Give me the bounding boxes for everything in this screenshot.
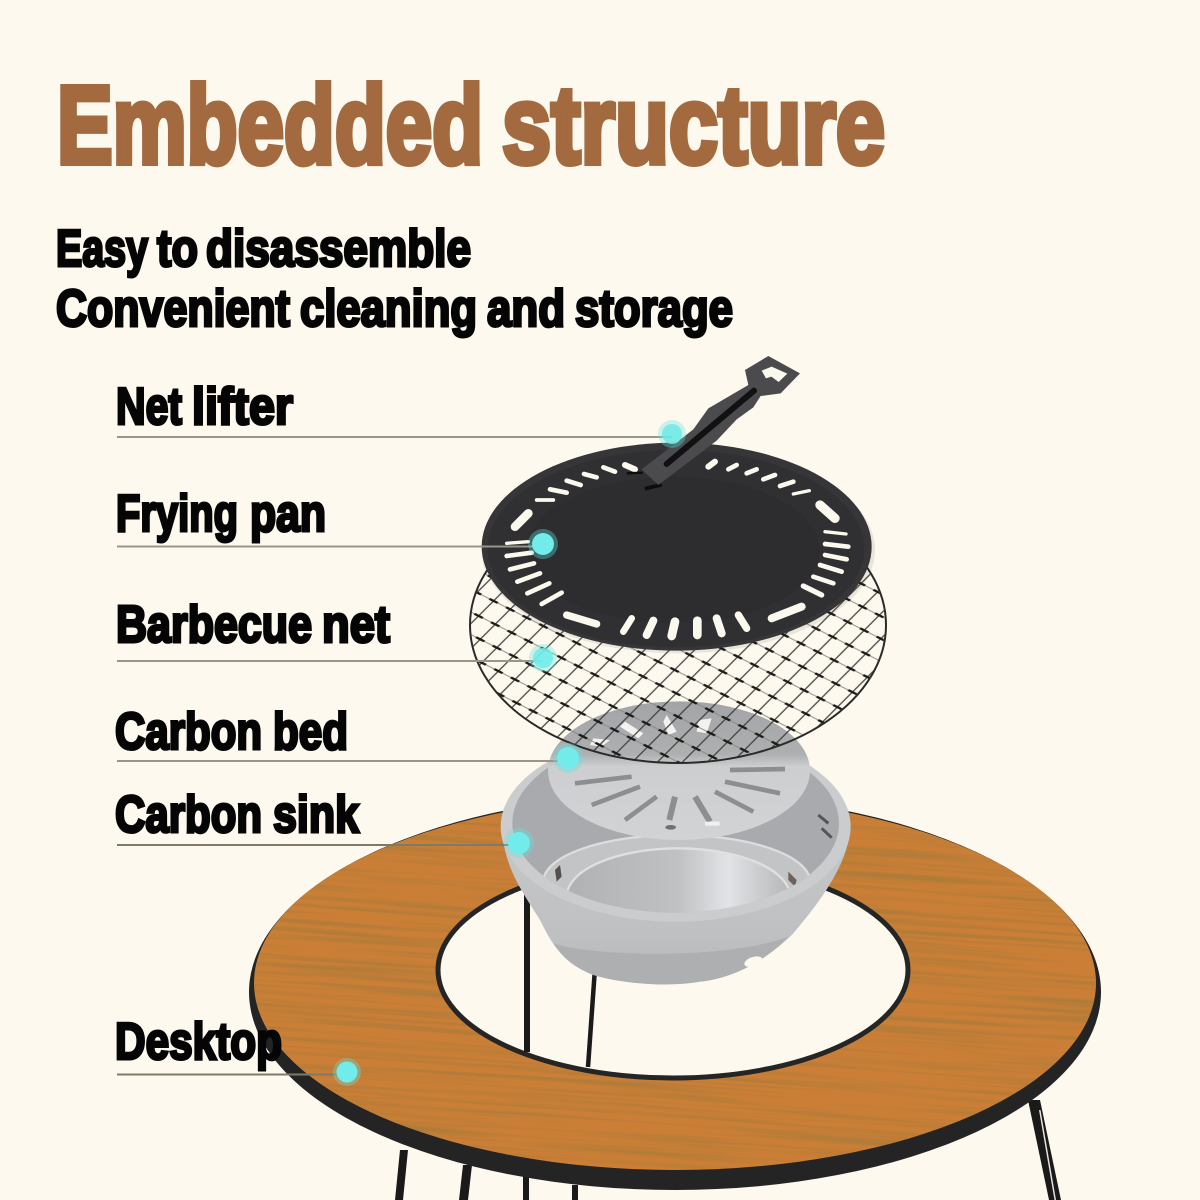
subtitle line 2: and (487, 280, 565, 338)
callouts (115, 378, 686, 1086)
leader line (117, 844, 519, 846)
lifter slits (627, 469, 643, 477)
label: Carbon (115, 786, 262, 844)
label: Net (116, 378, 182, 436)
subtitle line 1: to (157, 220, 198, 278)
wire mesh (471, 487, 885, 763)
lifter groove (667, 391, 754, 464)
frying pan (482, 443, 875, 653)
carbon bed: perforated disc (548, 701, 810, 840)
bottle opener (762, 367, 787, 382)
label: Barbecue (116, 596, 312, 654)
carbon sink: steel bowl (500, 762, 851, 984)
leader line (117, 1074, 347, 1076)
title: Embedded (57, 64, 483, 187)
label: lifter (192, 378, 293, 436)
label: bed (273, 703, 348, 761)
net lifter (627, 356, 800, 489)
callout: desktop (115, 1013, 361, 1086)
subtitle line 2: cleaning (300, 280, 477, 338)
disc slots (575, 769, 785, 822)
barbecue net (470, 487, 886, 763)
leader line (117, 660, 543, 662)
leader line (117, 760, 568, 762)
legs seen through the hole (527, 885, 595, 1067)
net rim (470, 487, 886, 763)
callout: carbon bed (115, 703, 583, 773)
marker dot (528, 529, 558, 559)
disc (548, 701, 810, 840)
label: Carbon (115, 703, 262, 761)
label: pan (250, 485, 326, 543)
callout: frying pan (116, 485, 558, 559)
wooden top (254, 812, 1096, 1170)
exploded product illustration (233, 356, 1117, 1200)
marker dot (333, 1058, 361, 1086)
table legs (395, 1100, 1061, 1200)
bowl body (502, 827, 850, 984)
callout: carbon sink (115, 786, 534, 858)
pan slots (507, 462, 848, 636)
label: net (322, 596, 390, 654)
label: sink (273, 786, 359, 844)
pan shadow (482, 447, 875, 653)
subtitle line 2: storage (575, 280, 733, 338)
marker dot (553, 743, 583, 773)
table: desktop with legs (249, 810, 1101, 1200)
table rim (249, 794, 1101, 1190)
callout: barbecue net (116, 596, 557, 672)
subtitle line 2: Convenient (56, 280, 290, 338)
disc bright openings (590, 715, 720, 830)
central hole (438, 862, 908, 1078)
label: Desktop (115, 1013, 282, 1071)
bowl rim (501, 732, 851, 922)
pan body (482, 443, 872, 651)
bowl air hole (743, 954, 764, 969)
title: structure (502, 64, 885, 187)
callout: net lifter (116, 378, 686, 448)
marker dot (658, 420, 686, 448)
marker dot (529, 644, 557, 672)
subtitle text block (56, 220, 733, 338)
label: Frying (116, 485, 238, 543)
leader line (117, 546, 543, 548)
subtitle line 1: disassemble (206, 220, 471, 278)
subtitle line 1: Easy (56, 220, 148, 278)
leader line (117, 436, 672, 438)
bowl interior (512, 734, 839, 913)
marker dot (504, 828, 534, 858)
lifter handle (642, 356, 800, 485)
